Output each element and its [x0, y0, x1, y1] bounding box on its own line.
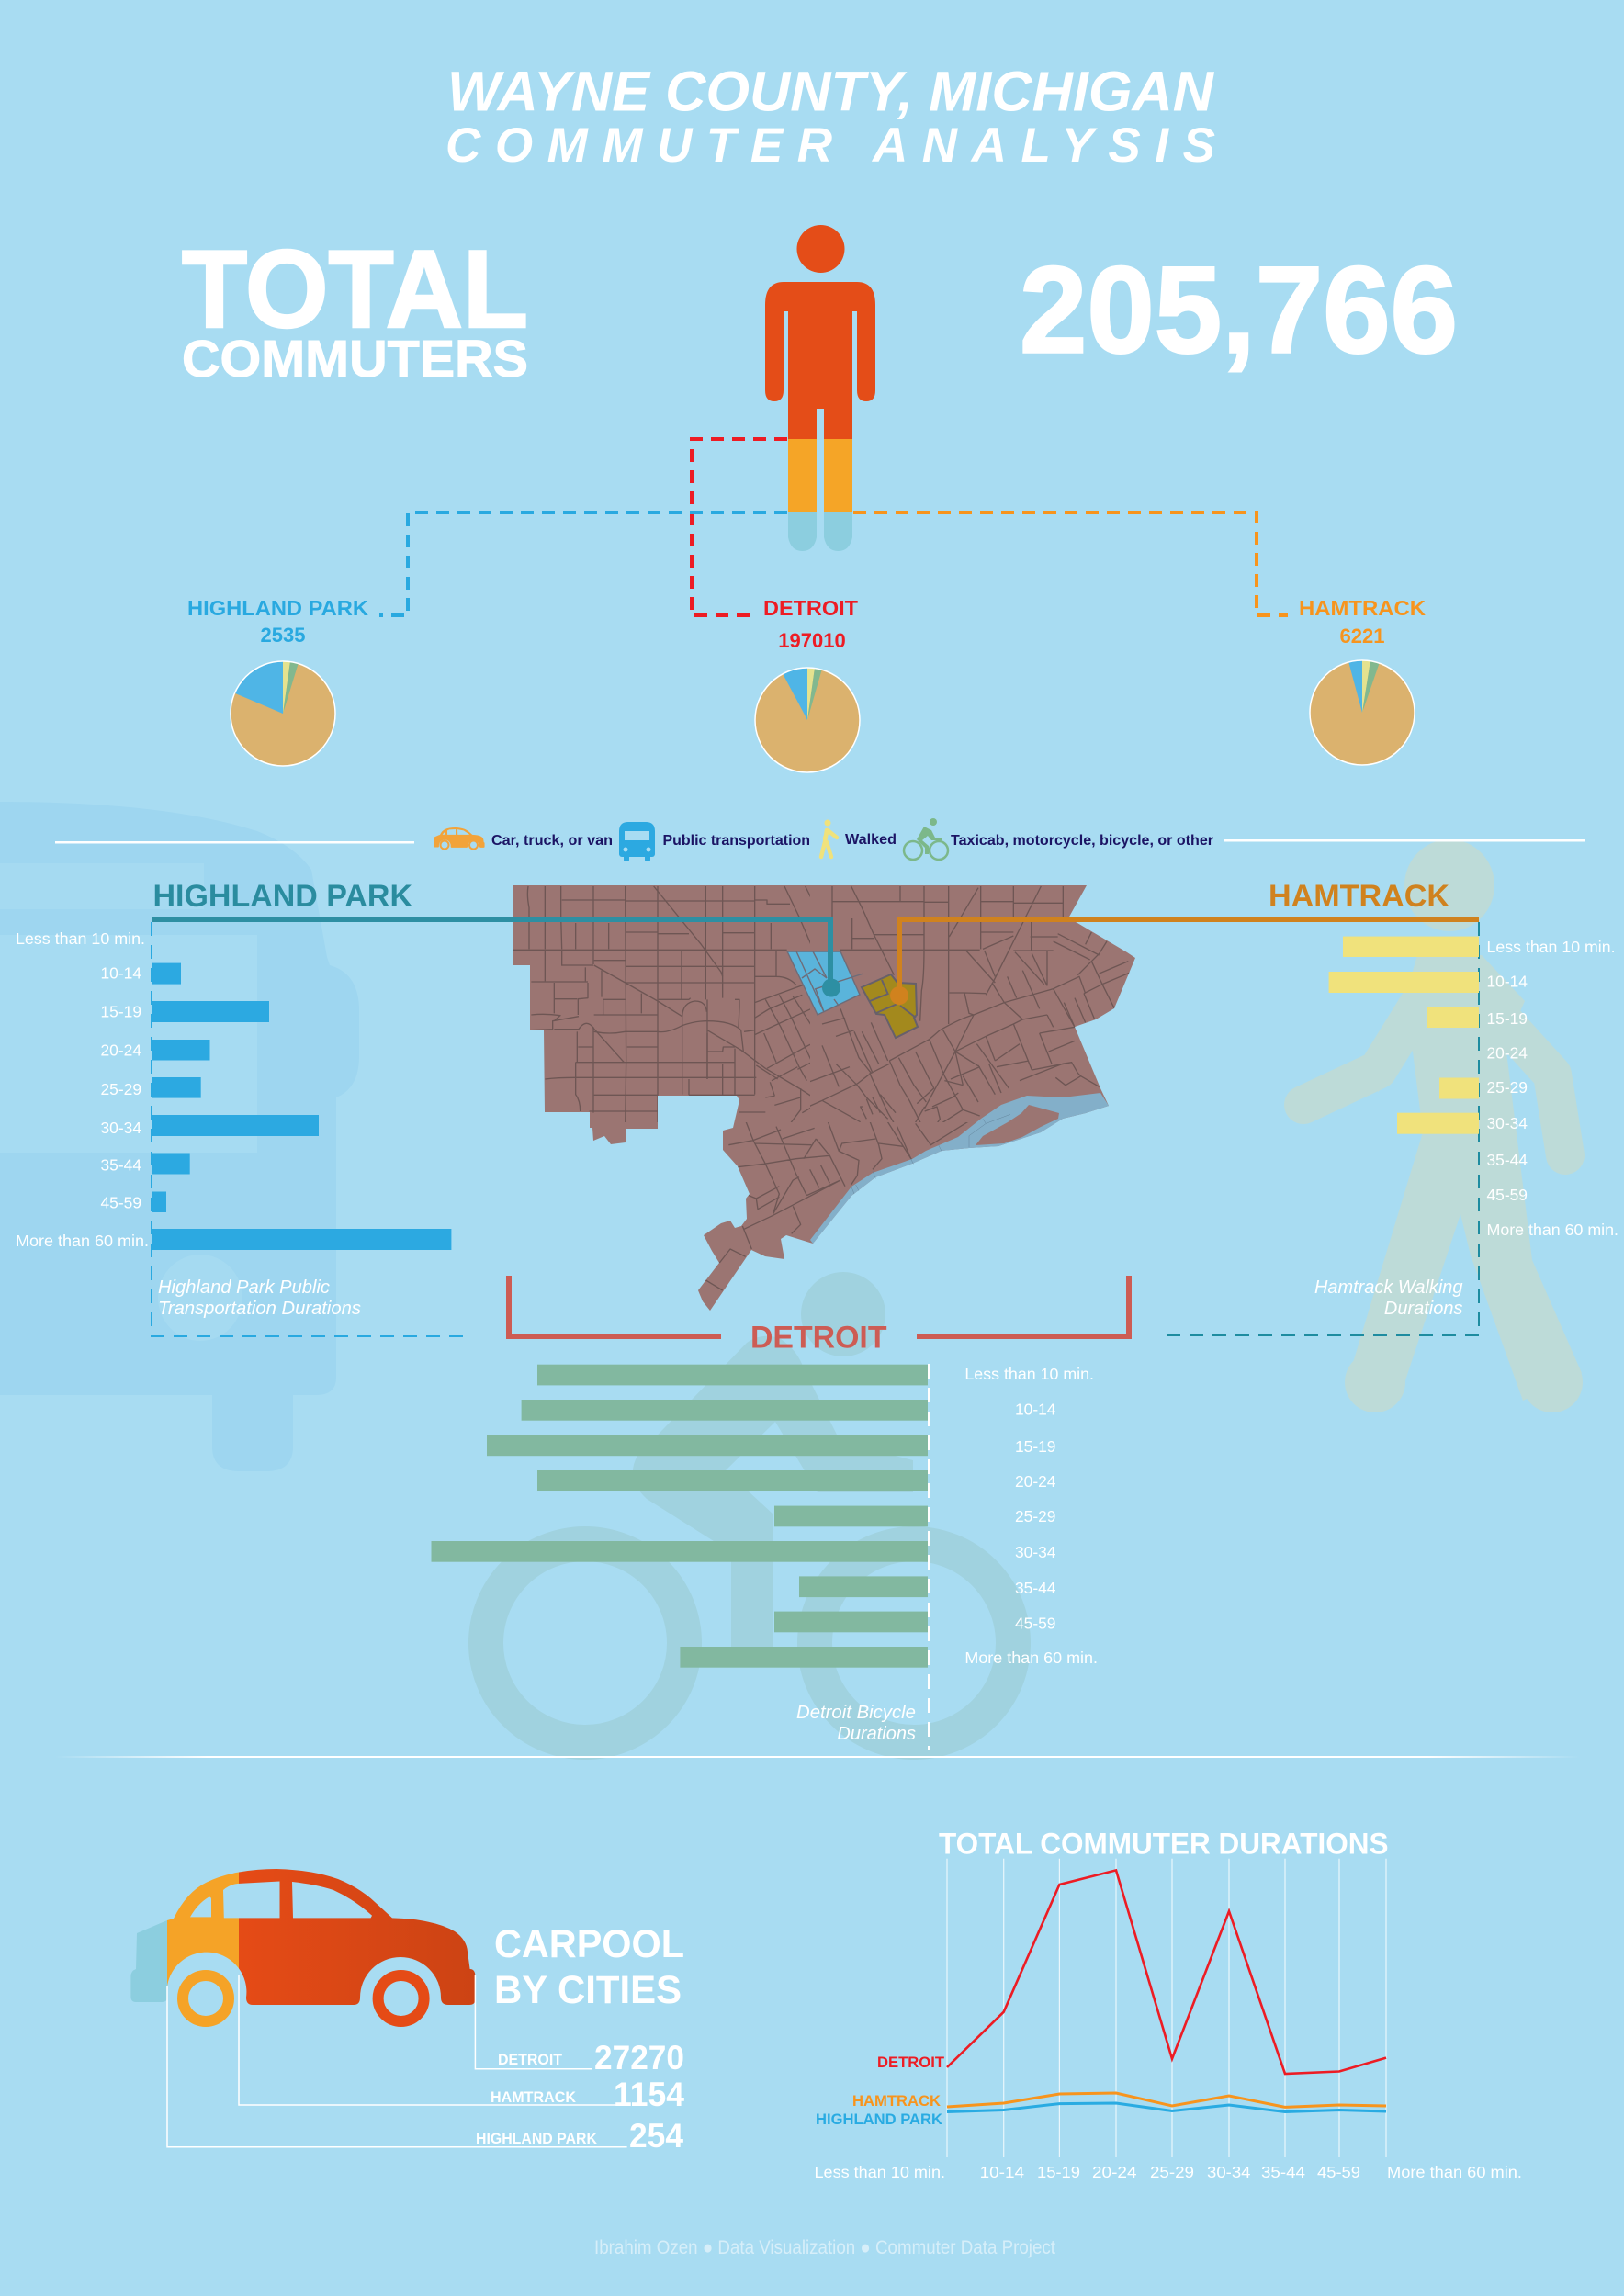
- carpool leaders and values: 254: [629, 2117, 683, 2155]
- line chart: total commuter durations: 30-34: [1207, 2163, 1251, 2181]
- region: Highland Park: [787, 951, 863, 1015]
- icon: car: [434, 827, 485, 849]
- legend: Taxicab, motorcycle, bicycle, or other: [951, 833, 1213, 849]
- map of Detroit neighbourhoods: [510, 882, 1144, 1318]
- bar chart: Highland Park public transportation durations: 30-34: [101, 1119, 141, 1137]
- streets: west side: [513, 886, 827, 1134]
- title: [445, 61, 1215, 173]
- bar chart: Hamtrack walking durations: 45-59: [1486, 1186, 1528, 1204]
- label: Hamtrack total: [1299, 596, 1426, 647]
- bar chart: Detroit bicycle durations: 45-59: [1015, 1615, 1055, 1633]
- connector: Highland Park: [379, 512, 787, 615]
- bar chart: Highland Park public transportation durations: 20-24: [101, 1041, 141, 1060]
- line chart: total commuter durations: Less than 10 min.: [814, 2163, 945, 2181]
- bar chart: Highland Park public transportation durations: More than 60 min.: [16, 1232, 149, 1250]
- line chart: total commuter durations: [814, 1859, 1522, 2181]
- background icon: walking person: [1303, 839, 1583, 1412]
- heading: Hamtrack: HAMTRACK: [1269, 879, 1449, 914]
- bar chart: Highland Park public transportation durations: 15-19: [101, 1003, 141, 1021]
- heading: Highland Park: HIGHLAND PARK: [152, 879, 412, 914]
- bar chart: Hamtrack walking durations: 10-14: [1486, 973, 1528, 991]
- leader: Highland Park to map: [152, 919, 840, 997]
- line chart: total commuter durations: 45-59: [1317, 2163, 1360, 2181]
- bar chart: Highland Park public transportation durations: 10-14: [101, 964, 141, 983]
- streets: east side: [810, 885, 1130, 1122]
- bracket: Detroit: [509, 1276, 1129, 1336]
- bar chart: Detroit bicycle durations: Detroit Bicycle: [796, 1703, 916, 1723]
- bar chart: Detroit bicycle durations: 20-24: [1015, 1472, 1056, 1491]
- bar chart: Highland Park public transportation durations: Highland Park Public: [158, 1277, 330, 1298]
- line chart: total commuter durations: More than 60 min.: [1387, 2163, 1522, 2181]
- streets: south side: [705, 1122, 968, 1291]
- icon: cyclist: [904, 818, 948, 860]
- bar chart: Highland Park public transportation durations: 35-44: [101, 1155, 141, 1174]
- bar chart: Hamtrack walking durations: [1166, 922, 1618, 1335]
- icon: bus: [619, 822, 655, 861]
- line chart: total commuter durations: HAMTRACK: [852, 2092, 942, 2110]
- bar chart: Highland Park public transportation durations: Transportation Durations: [158, 1299, 361, 1319]
- region: Hamtrack: [862, 974, 918, 1038]
- label: Detroit total: DETROIT: [763, 596, 858, 620]
- icon: walking person: [821, 819, 837, 857]
- line chart: total commuter durations: HIGHLAND PARK: [816, 2110, 943, 2128]
- bar chart: Hamtrack walking durations: 30-34: [1486, 1114, 1528, 1132]
- line chart: total commuter durations: DETROIT: [877, 2054, 945, 2071]
- legend: Public transportation: [663, 833, 810, 849]
- line chart: total commuter durations: 15-19: [1037, 2163, 1080, 2181]
- bar chart: Detroit bicycle durations: Less than 10 min.: [964, 1365, 1094, 1383]
- label: Hamtrack total: 6221: [1340, 625, 1384, 647]
- heading: total commuters: COMMUTERS: [182, 330, 528, 388]
- carpool leaders and values: DETROIT: [498, 2051, 563, 2068]
- icon: person split by city share: [765, 225, 875, 551]
- legend: Walked: [845, 832, 897, 848]
- bar chart: Hamtrack walking durations: More than 60 min.: [1486, 1221, 1618, 1239]
- bar chart: Detroit bicycle durations: 30-34: [1015, 1543, 1056, 1561]
- legend: [434, 818, 1213, 861]
- carpool leaders and values: HIGHLAND PARK: [476, 2130, 598, 2147]
- bar chart: Hamtrack walking durations: 35-44: [1486, 1151, 1528, 1169]
- bar chart: Detroit bicycle durations: 10-14: [1015, 1401, 1056, 1419]
- title: COMMUTER ANALYSIS: [445, 118, 1215, 173]
- carpool leaders and values: 1154: [614, 2076, 684, 2113]
- connector: Hamtrack: [853, 512, 1288, 615]
- heading: carpool by cities: BY CITIES: [494, 1968, 682, 2012]
- label: Highland Park total: 2535: [261, 624, 305, 647]
- bar chart: Hamtrack walking durations: Durations: [1384, 1299, 1462, 1319]
- river crossings: [851, 1114, 1010, 1194]
- heading: Detroit: DETROIT: [750, 1321, 887, 1356]
- line chart: total commuter durations: 10-14: [980, 2163, 1024, 2181]
- bar chart: Highland Park public transportation durations: 25-29: [101, 1080, 141, 1098]
- pie chart: Highland Park: [231, 661, 335, 766]
- island: [976, 1105, 1059, 1145]
- carpool leaders and values: HAMTRACK: [491, 2088, 577, 2106]
- footer credit: Ibrahim Ozen ● Data Visualization ● Commuter Data Project: [594, 2237, 1055, 2258]
- bar chart: Detroit bicycle durations: [432, 1364, 1098, 1750]
- bar chart: Detroit bicycle durations: 15-19: [1015, 1437, 1055, 1456]
- bar chart: Hamtrack walking durations: Hamtrack Walking: [1314, 1277, 1462, 1298]
- bar chart: Detroit bicycle durations: Durations: [837, 1724, 916, 1744]
- line chart: total commuter durations: 35-44: [1261, 2163, 1305, 2181]
- bar chart: Detroit bicycle durations: More than 60 min.: [964, 1649, 1098, 1667]
- total number: 205,766: [1020, 242, 1458, 378]
- heading: carpool by cities: CARPOOL: [494, 1922, 684, 1966]
- title: WAYNE COUNTY, MICHIGAN: [447, 61, 1215, 123]
- bar chart: Highland Park public transportation durations: 45-59: [101, 1194, 141, 1212]
- heading: total commuters: TOTAL: [182, 228, 528, 351]
- line chart: total commuter durations: 20-24: [1092, 2163, 1137, 2181]
- label: Detroit total: [763, 596, 858, 652]
- heading: carpool by cities: [494, 1922, 684, 2012]
- bar chart: Hamtrack walking durations: 20-24: [1486, 1044, 1528, 1063]
- bar chart: Hamtrack walking durations: 15-19: [1486, 1009, 1528, 1028]
- bar chart: Detroit bicycle durations: 35-44: [1015, 1579, 1056, 1597]
- carpool leaders and values: [167, 1975, 684, 2155]
- icon: car split by city share: [129, 1864, 478, 2021]
- label: Highland Park total: [187, 596, 368, 647]
- bar chart: Hamtrack walking durations: Less than 10 min.: [1486, 938, 1615, 956]
- background icon: bus: [0, 802, 359, 1471]
- connector: Detroit: [692, 439, 787, 615]
- legend: Car, truck, or van: [491, 833, 613, 849]
- pie chart: Detroit: [755, 668, 860, 772]
- label: Detroit total: 197010: [778, 629, 846, 652]
- line chart: total commuter durations: 25-29: [1150, 2163, 1194, 2181]
- pie chart: Hamtrack: [1310, 660, 1415, 765]
- bar chart: Hamtrack walking durations: 25-29: [1486, 1078, 1528, 1097]
- heading: total commuter durations: TOTAL COMMUTER DURATIONS: [939, 1828, 1389, 1861]
- bar chart: Highland Park public transportation durations: Less than 10 min.: [16, 929, 145, 948]
- background icon: cyclist: [486, 1272, 1013, 1742]
- river edge: [810, 1093, 1109, 1244]
- bar chart: Detroit bicycle durations: 25-29: [1015, 1507, 1055, 1525]
- leader: Hamtrack to map: [890, 919, 1479, 1005]
- carpool leaders and values: 27270: [594, 2039, 684, 2077]
- label: Hamtrack total: HAMTRACK: [1299, 596, 1426, 620]
- bar chart: Highland Park public transportation durations: [16, 922, 464, 1336]
- label: Highland Park total: HIGHLAND PARK: [187, 596, 368, 620]
